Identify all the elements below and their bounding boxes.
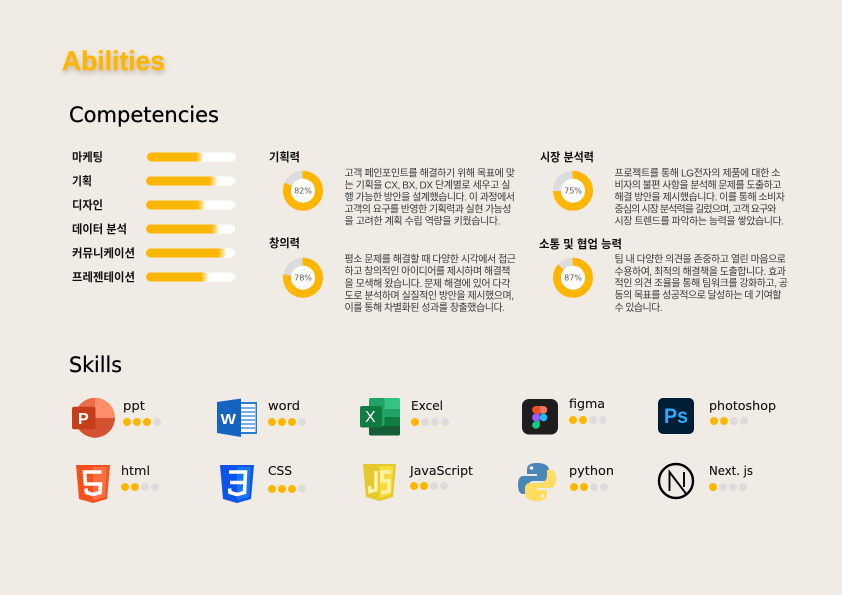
text block: planning ability: 을 고려한 계획 수립 역량을 키웠습니다. <box>344 214 500 228</box>
text block: planning ability: 고객 페인포인트를 해결하기 위해 목표에 맞 <box>344 166 515 180</box>
icon: powerpoint: P <box>78 411 89 428</box>
donut: 87% <box>557 262 589 294</box>
text block: market analysis: 시장 트렌드를 파악하는 능력을 쌓았습니다. <box>614 214 784 228</box>
icon: excel: X <box>365 409 376 426</box>
bar: presentation <box>72 270 235 284</box>
icon: html5 <box>76 465 110 503</box>
bar: data analysis <box>72 222 235 236</box>
donut: 75%: 75% <box>564 187 582 196</box>
text block: creativity: 도로 분석하며 실질적인 방안을 제시했으며, <box>344 289 514 302</box>
text block: communication and collaboration: 적인 의견 조율을 통해 팀워크를 강화하고, 공 <box>614 276 788 290</box>
text block: planning ability <box>344 166 515 228</box>
text block: planning ability: 는 기획을 CX, BX, DX 단계별로 세우고 실 <box>344 180 510 192</box>
skill: html <box>76 463 159 503</box>
donut: 82%: 82% <box>294 187 312 196</box>
text block: market analysis: 비자의 불편 사항을 분석해 문제를 도출하고 <box>614 178 782 192</box>
bar: communication <box>72 246 235 260</box>
heading: planning ability: 기획력 <box>269 150 300 164</box>
skill: css: CSS <box>268 463 292 478</box>
panel: planning ability <box>269 150 515 228</box>
skill: photoshop: photoshop <box>709 398 776 413</box>
skill: next.js: Next. js <box>709 463 753 478</box>
skill: excel <box>360 398 449 436</box>
text block: creativity: 을 모색해 왔습니다. 문제 해결에 있어 다각 <box>344 277 510 290</box>
text block: market analysis: 해결 방안을 제시했습니다. 이를 통해 소비자 <box>614 190 785 204</box>
bar: presentation: 프레젠테이션 <box>72 270 135 284</box>
text block: planning ability: 행 가능한 방안을 설계했습니다. 이 과정에서 <box>344 190 515 204</box>
skill: word: word <box>268 398 300 413</box>
text block: planning ability: 고객의 요구를 반영한 기획력과 실현 가능성 <box>344 204 512 216</box>
bar: communication: 커뮤니케이션 <box>72 246 135 260</box>
text block: creativity: 평소 문제를 해결할 때 다양한 시각에서 접근 <box>344 252 516 266</box>
donut: 75% <box>557 175 589 207</box>
skill: python <box>518 463 614 501</box>
skill: css <box>220 463 306 503</box>
skill: word <box>217 398 306 437</box>
panel: market analysis <box>540 151 785 228</box>
skill: photoshop <box>658 398 776 434</box>
skill: javascript: JavaScript <box>409 463 473 478</box>
text block: communication and collaboration: 동의 목표를 성공적으로 달성하는 데 기여할 <box>614 288 782 302</box>
icon: css3 <box>220 465 254 503</box>
panel: creativity <box>269 236 516 314</box>
donut: 82% <box>287 175 319 207</box>
bar: marketing: 마케팅 <box>72 150 103 164</box>
icon: figma <box>522 399 558 434</box>
heading: competencies: Competencies <box>69 103 219 127</box>
skill: figma: figma <box>569 396 605 411</box>
bar: marketing <box>72 150 236 164</box>
text block: communication and collaboration: 수용하여, 최적의 해결책을 도출합니다. 효과 <box>614 265 786 278</box>
panel: communication and collaboration <box>539 237 788 314</box>
text block: communication and collaboration: 팀 내 다양한 의견을 존중하고 열린 마음으로 <box>614 252 786 266</box>
bar: planning: 기획 <box>72 174 92 188</box>
icon: next.js <box>659 464 693 498</box>
text block: communication and collaboration <box>614 252 788 314</box>
bar: design: 디자인 <box>72 199 103 212</box>
skill: next.js <box>659 463 753 498</box>
bar: planning <box>72 174 235 188</box>
icon: photoshop: Ps <box>664 405 688 428</box>
text block: market analysis: 프로젝트를 통해 LG전자의 제품에 대한 소 <box>614 166 780 180</box>
icon: python <box>518 463 556 501</box>
donut: 87%: 87% <box>564 274 582 283</box>
text block: creativity: 이를 통해 차별화된 성과를 창출했습니다. <box>344 301 505 314</box>
icon: word: W <box>220 411 237 428</box>
icon: javascript <box>363 464 396 501</box>
text block: market analysis: 중심의 시장 분석력을 길렀으며, 고객 요구와 <box>614 202 776 216</box>
text block: communication and collaboration: 수 있습니다. <box>614 302 662 314</box>
panel: competency bars <box>72 150 236 284</box>
skill: javascript <box>363 463 473 501</box>
heading: communication and collaboration: 소통 및 협업 능력 <box>539 237 622 251</box>
bar: design <box>72 199 235 212</box>
skill: python: python <box>569 463 614 478</box>
donut: 78% <box>287 262 319 294</box>
text block: market analysis <box>614 166 785 228</box>
heading: creativity: 창의력 <box>269 236 300 250</box>
donut: 78%: 78% <box>294 274 312 283</box>
skill: excel: Excel <box>411 398 443 413</box>
text block: creativity <box>344 252 516 314</box>
bar: data analysis: 데이터 분석 <box>72 222 127 236</box>
heading: skills: Skills <box>69 353 122 377</box>
skill: ppt: ppt <box>123 398 145 413</box>
skill: html: html <box>121 463 150 478</box>
skill: ppt <box>72 398 161 438</box>
title: Abilities <box>62 46 165 76</box>
text block: creativity: 하고 창의적인 아이디어를 제시하며 해결책 <box>344 264 510 278</box>
skill: figma <box>522 396 607 434</box>
heading: market analysis: 시장 분석력 <box>540 151 594 164</box>
